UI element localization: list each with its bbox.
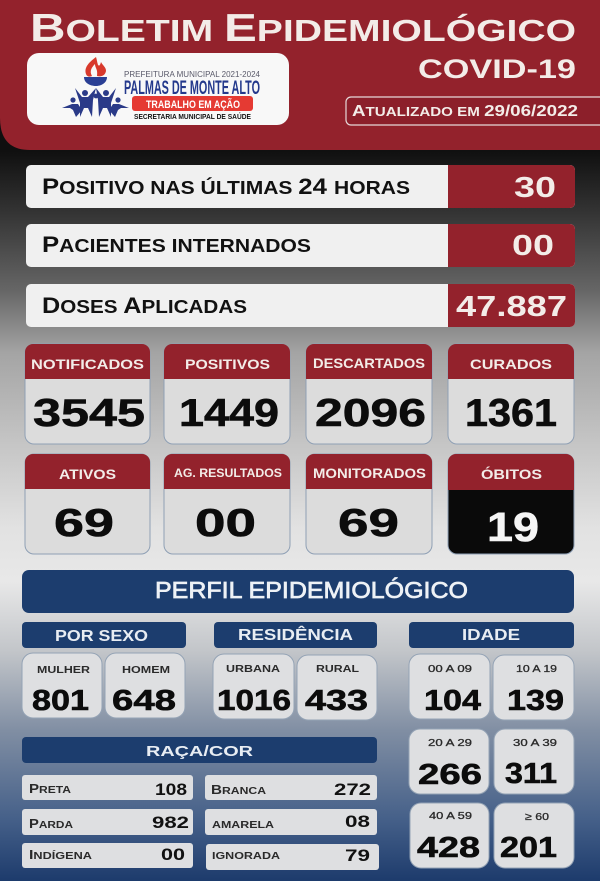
card: mulher: 801	[32, 685, 89, 717]
card: ativos	[25, 454, 150, 554]
card: positivos: 1449	[179, 392, 279, 435]
row: positivo 24 horas	[26, 165, 575, 208]
row: parda: 982	[152, 813, 189, 832]
card: homem	[105, 653, 185, 718]
row: preta: 108	[155, 780, 187, 799]
card: curados	[448, 344, 574, 444]
card: rural: 433	[305, 685, 368, 717]
card: 40 a 59: 428	[417, 832, 480, 864]
heading: idade	[409, 622, 574, 648]
header banner	[0, 0, 600, 150]
logo text: PREFEITURA MUNICIPAL 2021-2024	[124, 70, 261, 79]
card: homem: HOMEM	[122, 664, 170, 676]
icon: flame	[85, 57, 106, 77]
row: doses aplicadas: 47.887	[456, 291, 567, 323]
logo: SECRETARIA MUNICIPAL DE SAÚDE	[134, 112, 251, 121]
card: 00 a 09	[409, 654, 490, 719]
card: 00 a 09: 00 A 09	[428, 663, 472, 675]
date box: ATUALIZADO EM 29/06/2022	[352, 103, 578, 120]
section heading: perfil epidemiológico: PERFIL EPIDEMIOLÓGICO	[155, 577, 468, 603]
card: ativos: 69	[54, 502, 114, 545]
row: pacientes internados	[26, 224, 575, 267]
row: pacientes internados: PACIENTES INTERNADOS	[42, 232, 311, 257]
card: ag. resultados: AG. RESULTADOS	[174, 468, 282, 480]
row: indígena	[22, 843, 193, 868]
card: 00 a 09: 104	[424, 685, 481, 717]
card: 20 a 29: 266	[418, 759, 482, 791]
heading: raça/cor: RAÇA/COR	[146, 743, 253, 760]
card: 10 a 19: 139	[507, 685, 564, 717]
card: 30 a 39: 311	[505, 758, 557, 790]
title: BOLETIM EPIDEMIOLÓGICO	[30, 7, 576, 50]
subtitle: COVID-19	[418, 54, 576, 84]
card: óbitos	[448, 454, 574, 554]
card: 30 a 39	[494, 729, 574, 794]
row: indígena: INDÍGENA	[29, 848, 92, 862]
card: óbitos: 19	[487, 504, 539, 550]
card: 30 a 39: 30 A 39	[513, 737, 557, 749]
card: 10 a 19: 10 A 19	[516, 663, 557, 675]
heading: idade: IDADE	[462, 627, 520, 644]
row: ignorada: IGNORADA	[212, 851, 280, 862]
card: 60 ou mais: ≥ 60	[525, 811, 549, 823]
section heading: perfil epidemiológico	[22, 570, 574, 613]
row: pacientes internados: 00	[512, 230, 554, 262]
heading: raça/cor	[22, 737, 377, 763]
card: rural	[297, 655, 377, 720]
card: mulher: MULHER	[37, 664, 90, 676]
card: ag. resultados	[164, 454, 290, 554]
row: positivo 24 horas: 30	[514, 172, 556, 204]
card: ativos: ATIVOS	[59, 466, 116, 482]
logo	[27, 53, 289, 125]
card: 20 a 29	[409, 729, 489, 794]
row: indígena: 00	[161, 845, 185, 864]
card: descartados: 2096	[315, 392, 426, 435]
row: preta: PRETA	[29, 782, 71, 796]
row: positivo 24 horas: POSITIVO NAS ÚLTIMAS 24 HORAS	[42, 174, 410, 199]
card: positivos: POSITIVOS	[185, 356, 270, 372]
card: óbitos: ÓBITOS	[481, 465, 542, 482]
card: 40 a 59: 40 A 59	[429, 810, 472, 822]
card: mulher	[22, 653, 102, 718]
card: urbana	[213, 654, 294, 719]
icon: bowl	[84, 77, 107, 86]
logo: PALMAS DE MONTE ALTO	[124, 78, 260, 99]
card: monitorados: MONITORADOS	[313, 465, 426, 481]
row: parda	[22, 809, 193, 835]
card: curados: 1361	[465, 392, 557, 435]
row: ignorada	[206, 844, 379, 870]
row: preta	[22, 775, 193, 800]
row: amarela	[205, 809, 377, 835]
card: positivos	[164, 344, 290, 444]
row: branca	[205, 775, 377, 800]
heading: por sexo	[22, 622, 186, 648]
row: parda: PARDA	[29, 817, 73, 831]
card: 10 a 19	[493, 655, 574, 720]
card: 60 ou mais: 201	[500, 832, 557, 864]
date box	[346, 97, 600, 125]
card: urbana: URBANA	[226, 663, 280, 675]
icon: people	[62, 88, 129, 117]
row: branca: 272	[334, 780, 371, 799]
heading: por sexo: POR SEXO	[55, 628, 148, 645]
card: descartados: DESCARTADOS	[313, 355, 425, 371]
row: amarela: 08	[345, 812, 370, 831]
card: ag. resultados: 00	[195, 502, 256, 545]
card: urbana: 1016	[217, 685, 291, 717]
row: ignorada: 79	[345, 846, 370, 865]
card: curados: CURADOS	[470, 356, 552, 372]
card: notificados: 3545	[33, 392, 145, 435]
card: monitorados	[306, 454, 432, 554]
card: 40 a 59	[410, 803, 489, 868]
card: monitorados: 69	[338, 502, 399, 545]
row: doses aplicadas	[26, 284, 575, 327]
row: branca: BRANCA	[211, 783, 266, 797]
row: doses aplicadas: DOSES APLICADAS	[42, 293, 247, 318]
card: notificados: NOTIFICADOS	[31, 356, 144, 372]
card: homem: 648	[112, 685, 176, 717]
heading: residência: RESIDÊNCIA	[238, 625, 354, 644]
card: 20 a 29: 20 A 29	[428, 737, 472, 749]
card: descartados	[306, 344, 432, 444]
card: 60 ou mais	[494, 803, 574, 868]
row: amarela: AMARELA	[212, 820, 274, 831]
card: rural: RURAL	[316, 663, 360, 675]
logo: TRABALHO EM AÇÃO	[146, 98, 240, 111]
card: notificados	[25, 344, 150, 444]
heading: residência	[214, 622, 377, 648]
